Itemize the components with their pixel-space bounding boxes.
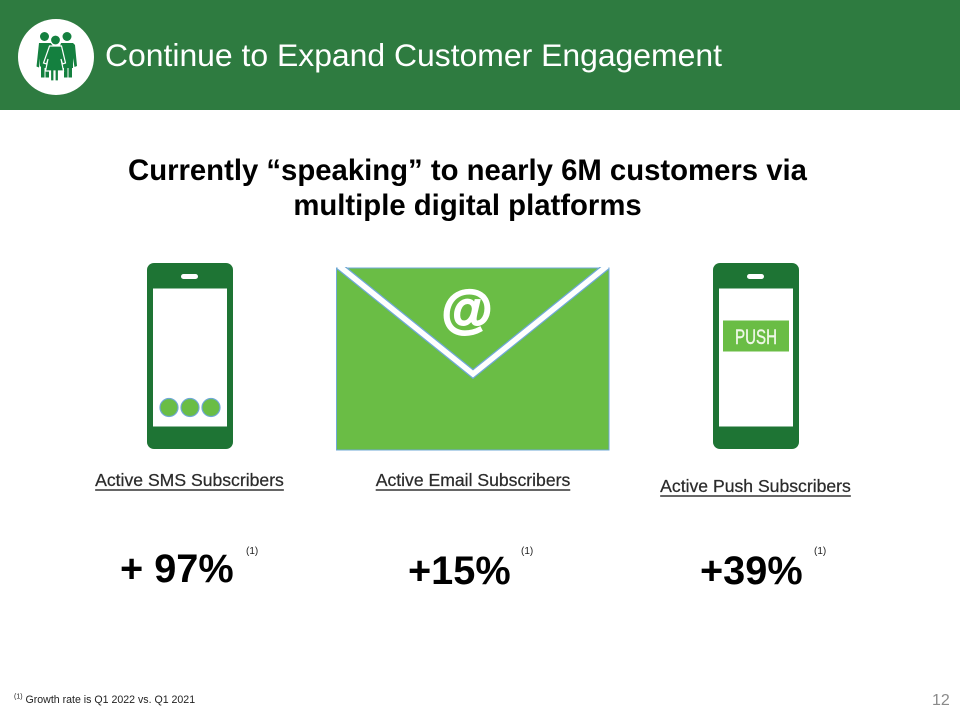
icon: customers group (18, 19, 94, 95)
email label: Active Email Subscribers (376, 470, 570, 490)
push footnote marker: (1) (814, 546, 826, 557)
email growth: +15% (408, 549, 511, 593)
subheading: multiple digital platforms (293, 189, 642, 222)
icon: push phone (713, 263, 799, 449)
header band (0, 0, 960, 110)
SMS footnote marker: (1) (246, 546, 258, 557)
SMS label: Active SMS Subscribers (95, 470, 284, 490)
subheading: Currently “speaking” to nearly 6M customers via (128, 154, 807, 187)
push label: Active Push Subscribers (660, 476, 851, 496)
title: Continue to Expand Customer Engagement (105, 37, 722, 73)
icon: SMS phone (147, 263, 233, 449)
SMS growth: + 97% (120, 547, 234, 591)
icon: email envelope (336, 267, 610, 450)
push growth: +39% (700, 549, 803, 593)
email footnote marker: (1) (521, 546, 533, 557)
subheading (128, 154, 808, 222)
at sign: @ (442, 281, 492, 339)
footnote: (1) Growth rate is Q1 2022 vs. Q1 2021 (14, 693, 195, 706)
page number: 12 (932, 692, 950, 709)
icon: push phone: PUSH (735, 326, 777, 349)
